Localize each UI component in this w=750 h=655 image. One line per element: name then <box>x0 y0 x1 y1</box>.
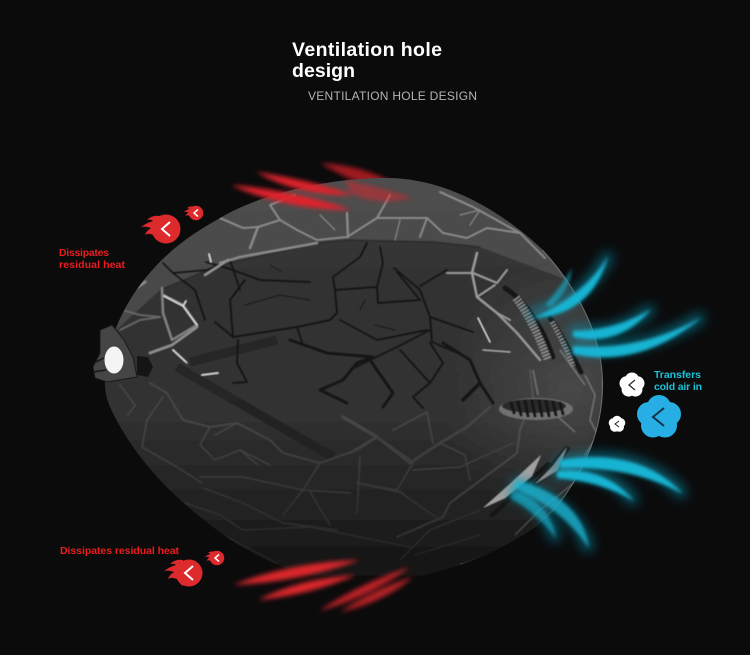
red heat streak behind top of helmet <box>320 163 414 198</box>
diagonal band <box>176 364 312 440</box>
icon: blue cloud, large <box>637 395 681 438</box>
red heat streaks: bottom <box>233 560 413 612</box>
label: dissipates residual heat, upper: residual heat <box>59 259 126 271</box>
helmet <box>93 170 620 590</box>
upper vent slots <box>505 288 581 372</box>
lower grey cracks <box>120 370 533 563</box>
upper grey cracks <box>120 192 545 363</box>
badge: large flame, upper left <box>141 214 180 244</box>
cold air streaks: core <box>510 256 702 548</box>
label: transfers cold air in: Transfers <box>654 369 701 381</box>
bright white highlights <box>164 254 510 375</box>
title: Ventilation hole <box>292 39 442 61</box>
helmet shell <box>100 170 620 590</box>
cold air streaks: glow <box>513 257 700 547</box>
badge: small flame, lower <box>204 551 224 565</box>
badge: small flame, upper left <box>184 206 203 220</box>
badge: large flame, lower <box>164 560 202 586</box>
vertical shading <box>120 255 602 582</box>
lower vent slots <box>492 464 548 515</box>
label: dissipates residual heat, upper: Dissipates <box>59 247 109 259</box>
red heat streaks: top <box>231 172 412 210</box>
subtitle: VENTILATION HOLE DESIGN <box>308 89 477 103</box>
lamp clip <box>137 356 153 377</box>
label: dissipates residual heat, lower: Dissipates residual heat <box>60 545 180 557</box>
label: transfers cold air in <box>654 369 702 393</box>
headlamp <box>93 325 153 382</box>
lamp housing <box>93 325 137 382</box>
icon: white cloud, small <box>609 416 625 432</box>
lamp lens <box>104 346 124 374</box>
title second line: design <box>292 60 355 82</box>
icon: white cloud, medium <box>620 372 644 397</box>
dark cracks <box>163 243 493 408</box>
right translucent rim <box>543 250 603 503</box>
label: transfers cold air in: cold air in <box>654 381 702 393</box>
label: dissipates residual heat, upper <box>59 247 126 271</box>
centre vent <box>499 398 573 420</box>
right edge cracks <box>514 350 596 536</box>
